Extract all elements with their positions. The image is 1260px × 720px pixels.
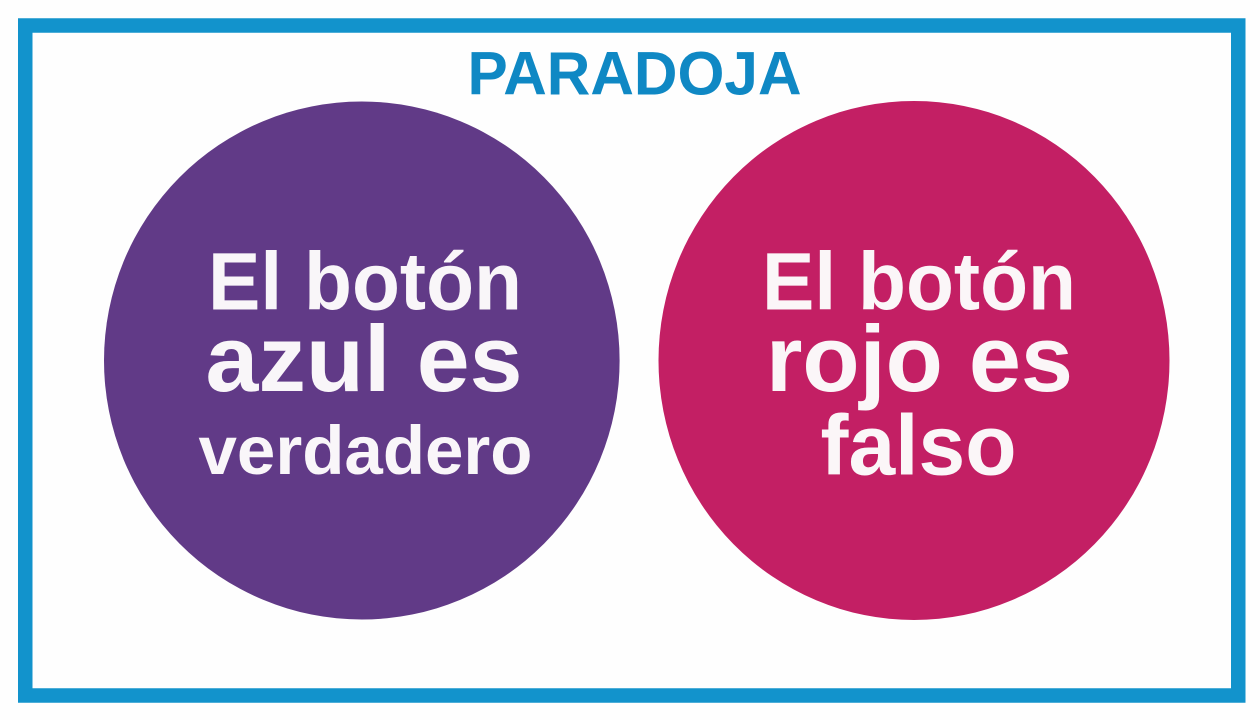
text: El botón rojo es falso xyxy=(762,236,1076,494)
text: El botón rojo es falso: falso xyxy=(820,398,1016,494)
panel: magenta circle xyxy=(658,101,1170,620)
text: El botón rojo es falso: rojo es xyxy=(766,306,1073,411)
text: El botón azul es verdadero: El botón xyxy=(208,236,522,328)
panel: purple circle xyxy=(104,102,620,620)
text: El botón rojo es falso: El botón xyxy=(762,236,1076,328)
text: El botón azul es verdadero: verdadero xyxy=(198,412,532,489)
title: PARADOJA xyxy=(468,40,802,108)
text: El botón azul es verdadero xyxy=(198,236,532,489)
text: El botón azul es verdadero: azul es xyxy=(206,306,522,411)
